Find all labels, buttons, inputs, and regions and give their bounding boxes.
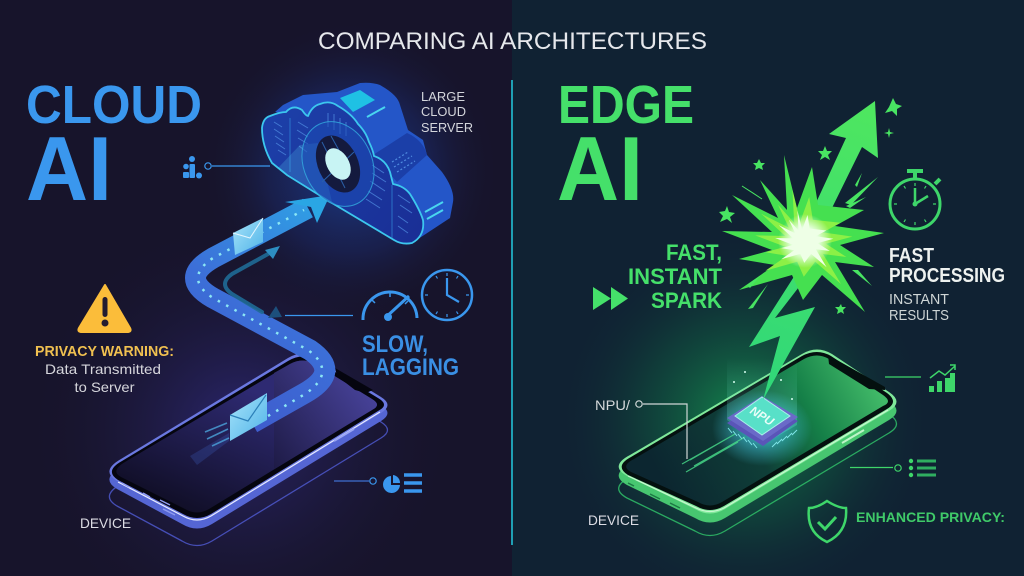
warning: privacy [35, 285, 174, 395]
chip: NPU: NPU [748, 403, 777, 429]
enhanced privacy [809, 501, 1005, 542]
icon: stopwatch [890, 171, 940, 229]
icon: fast forward [593, 287, 628, 310]
icon: growth chart with connector [885, 365, 955, 392]
text: fast instant spark: FAST, [666, 240, 722, 265]
icon: pie and list with connector [334, 475, 422, 493]
text: fast instant spark [628, 240, 723, 313]
icon: clock [422, 270, 472, 320]
text: fast instant spark: SPARK [651, 288, 722, 313]
panel: edge AI [512, 0, 1024, 576]
data path: road from phone to cloud [190, 195, 330, 465]
phone: device [588, 350, 896, 536]
label: large cloud server: SERVER [421, 120, 473, 135]
icon: small bars with connector [183, 156, 270, 178]
text: fast processing: INSTANT [889, 291, 949, 308]
starburst [722, 155, 884, 312]
text: fast processing: FAST [889, 245, 934, 267]
text: enhanced privacy: ENHANCED PRIVACY: [856, 509, 1005, 525]
icon: envelope on route [233, 218, 263, 255]
divider [511, 80, 513, 545]
text: privacy warning: Data Transmitted [45, 361, 161, 377]
text: slow lagging: LAGGING [362, 354, 459, 381]
icon: envelope on phone [230, 393, 267, 441]
heading: Cloud AI: CLOUD [26, 75, 202, 135]
text: fast processing [889, 245, 1005, 324]
label: device: DEVICE [80, 515, 131, 531]
label: device: DEVICE [588, 512, 639, 528]
text: privacy warning: to Server [74, 379, 135, 395]
heading: Edge AI [557, 75, 694, 220]
secondary slow arrow [225, 246, 282, 318]
label: large cloud server: LARGE [421, 89, 465, 104]
phone: device [80, 354, 388, 546]
chip: NPU [682, 358, 812, 472]
icon: warning triangle [78, 285, 131, 332]
label: large cloud server: CLOUD [421, 104, 466, 119]
lightning bolt [749, 270, 815, 400]
text: privacy warning [35, 344, 174, 395]
heading: Cloud AI: AI [26, 119, 112, 220]
callout: slow, lagging [285, 270, 472, 381]
heading: Edge AI: EDGE [558, 75, 694, 135]
burst: spark, bolt and arrow [719, 98, 902, 400]
label: large cloud server [421, 89, 473, 135]
icon: speedometer [363, 292, 417, 321]
title: COMPARING AI ARCHITECTURES [318, 28, 707, 55]
heading: Edge AI: AI [557, 119, 643, 220]
panel: cloud AI [0, 0, 512, 576]
text: slow lagging [362, 331, 459, 381]
text: slow lagging: SLOW, [362, 331, 428, 358]
text: fast processing: PROCESSING [889, 265, 1005, 287]
heading: Cloud AI [26, 75, 202, 220]
text: fast processing: RESULTS [889, 307, 949, 324]
icon: shield [809, 501, 846, 542]
arrow: upward [815, 101, 878, 212]
text: privacy warning: PRIVACY WARNING: [35, 344, 174, 360]
callout: NPU: NPU/ [595, 397, 630, 413]
cloud server [262, 83, 473, 244]
icon: list with connector [850, 459, 936, 477]
text: fast instant spark: INSTANT [628, 264, 723, 289]
sparks and stars [719, 98, 902, 314]
callout: NPU [595, 397, 687, 459]
